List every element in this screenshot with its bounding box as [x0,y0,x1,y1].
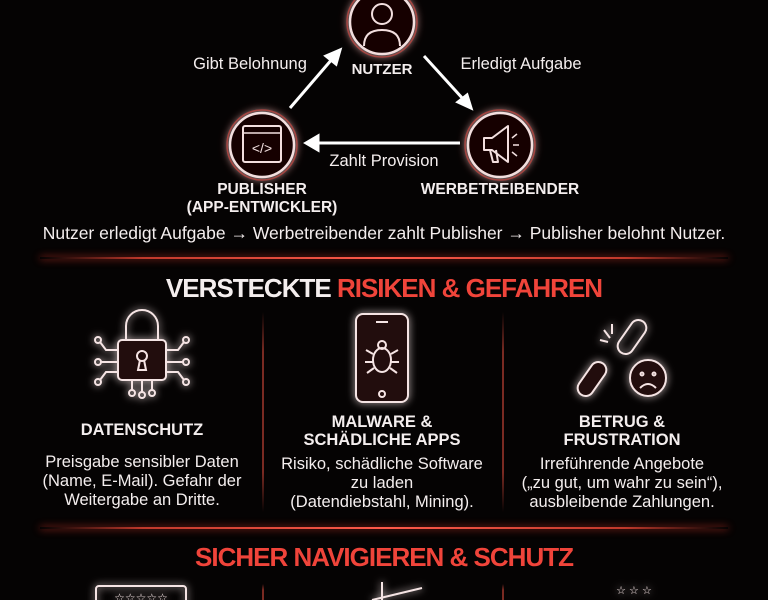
text: Zahlt Provision [329,152,439,170]
text: Malware [281,413,483,511]
text: Malware: (Datendiebstahl, Mining). [290,493,474,511]
icon: broken chain and sad face [575,317,666,399]
icon: phone with bug [356,314,408,402]
text: Malware: MALWARE & [332,413,432,431]
bottom icons partial: ☆ ☆ ☆ [616,585,652,597]
labels: NUTZER [352,61,412,78]
icon: Nutzer [347,0,417,57]
text: WERBETREIBENDER [421,181,579,198]
text: Betrug [522,413,722,511]
icons: risks [89,303,673,410]
icon: lock [95,310,189,398]
heading: protection: SICHER NAVIGIEREN & SCHUTZ [195,542,573,572]
icon: Publisher [227,110,297,180]
text: Betrug: FRUSTRATION [563,431,680,449]
diagram: revenue cycle [221,0,541,186]
arrows [290,50,471,150]
text: Datenschutz [43,421,242,509]
text: Datenschutz: Preisgabe sensibler Daten [45,453,239,471]
text: PUBLISHER [217,181,307,198]
text: Malware: SCHÄDLICHE APPS [303,431,461,449]
text: Betrug: („zu gut, um wahr zu sein“), [522,474,722,492]
text: Betrug: BETRUG & [579,413,665,431]
text: Malware: zu laden [351,474,413,492]
icon: Publisher: </> [252,140,272,156]
text: Betrug: ausbleibende Zahlungen. [529,493,715,511]
summary sentence: Nutzer erledigt Aufgabe → Werbetreibender zahlt Publisher → Publisher belohnt Nutzer. [43,223,725,243]
text: Malware: Risiko, schädliche Software [281,455,483,473]
text: Datenschutz: Weitergabe an Dritte. [64,491,220,509]
text: Datenschutz: DATENSCHUTZ [81,421,203,439]
text: (APP-ENTWICKLER) [187,199,337,216]
heading: risks: VERSTECKTE RISIKEN & GEFAHREN [166,273,602,303]
icon: Werbetreibender [465,110,535,180]
text: Erledigt Aufgabe [460,55,582,73]
text: Betrug: Irreführende Angebote [540,455,704,473]
text: Datenschutz: (Name, E-Mail). Gefahr der [43,472,241,490]
text: Gibt Belohnung [193,55,307,73]
bottom icons partial [88,578,652,600]
